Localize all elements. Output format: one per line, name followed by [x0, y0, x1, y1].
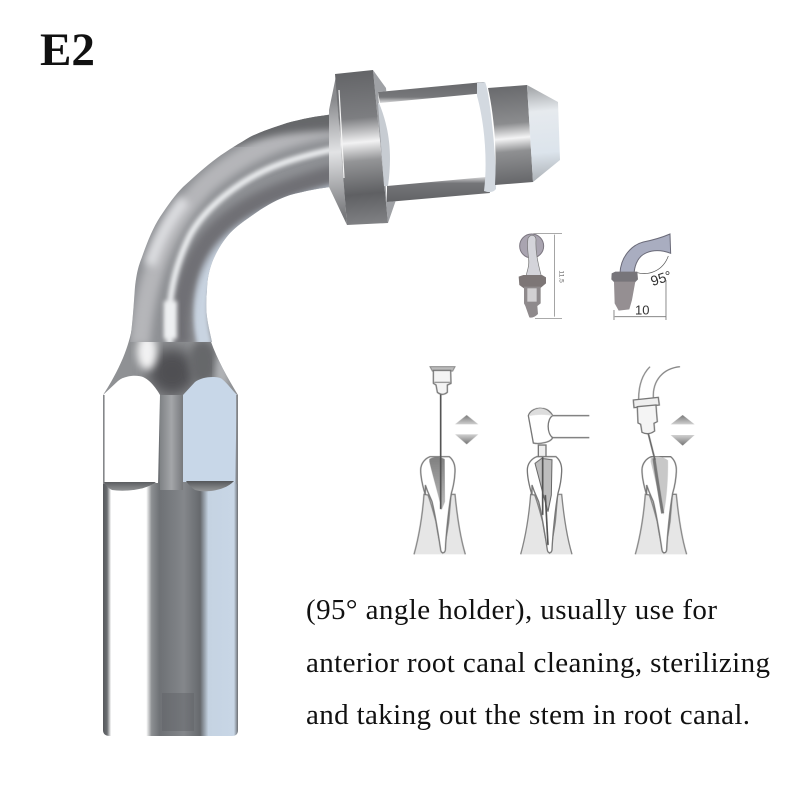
nut [611, 272, 638, 283]
nose cone [527, 85, 560, 182]
collar rear bevel [329, 76, 347, 225]
collar and hex head [329, 70, 560, 225]
arrow pair 2 [671, 415, 695, 446]
diagram: three root canal procedures [414, 367, 695, 554]
thumbnail: side view with 95 degree angle [611, 234, 674, 320]
line 3: and taking out the stem in root canal. [306, 699, 750, 731]
front darker step [162, 693, 194, 731]
right flat [183, 377, 237, 482]
hex body [378, 82, 495, 202]
line 1: (95° angle holder), usually use for [306, 594, 717, 626]
flat outer edges [104, 395, 237, 484]
curved tube [130, 114, 329, 342]
collar highlight edge [339, 90, 344, 178]
left flat [103, 376, 160, 483]
collar ring [335, 70, 388, 225]
tooth 2 with contra-angle handpiece [521, 408, 589, 554]
tooth 1 with instrument [414, 367, 465, 554]
bottom dark band [387, 177, 490, 202]
thumbnail: tip front view with height dimension [519, 234, 564, 318]
centre strip [160, 395, 183, 490]
arrow pair 1 [455, 415, 478, 444]
right flat shadow [186, 481, 234, 491]
collar lens [378, 103, 390, 186]
95 label: 95° [648, 267, 674, 289]
hex shoulder [477, 82, 496, 192]
tip neck [103, 331, 238, 400]
tooth 3 with angled instrument [633, 367, 687, 554]
cylindrical shank [103, 400, 238, 736]
angle arc [637, 256, 668, 274]
head circle [520, 234, 544, 258]
nut [519, 275, 546, 288]
line 2: anterior root canal cleaning, sterilizing [306, 647, 770, 679]
description text [306, 594, 770, 731]
top dark band [378, 82, 486, 103]
stem [526, 235, 541, 276]
curved stem [620, 234, 671, 273]
body [524, 287, 541, 318]
body [614, 282, 635, 311]
left flat shadow [104, 482, 156, 491]
dimension label: 11.5 [557, 270, 564, 283]
10 label: 10 [635, 302, 649, 317]
dimension [533, 234, 562, 318]
title: E2 [40, 24, 95, 76]
body highlight [527, 288, 537, 302]
front neck [488, 85, 533, 185]
width dimension [614, 280, 666, 320]
illustration: E2 scaler tip [103, 114, 329, 736]
collar front bevel [373, 70, 396, 223]
